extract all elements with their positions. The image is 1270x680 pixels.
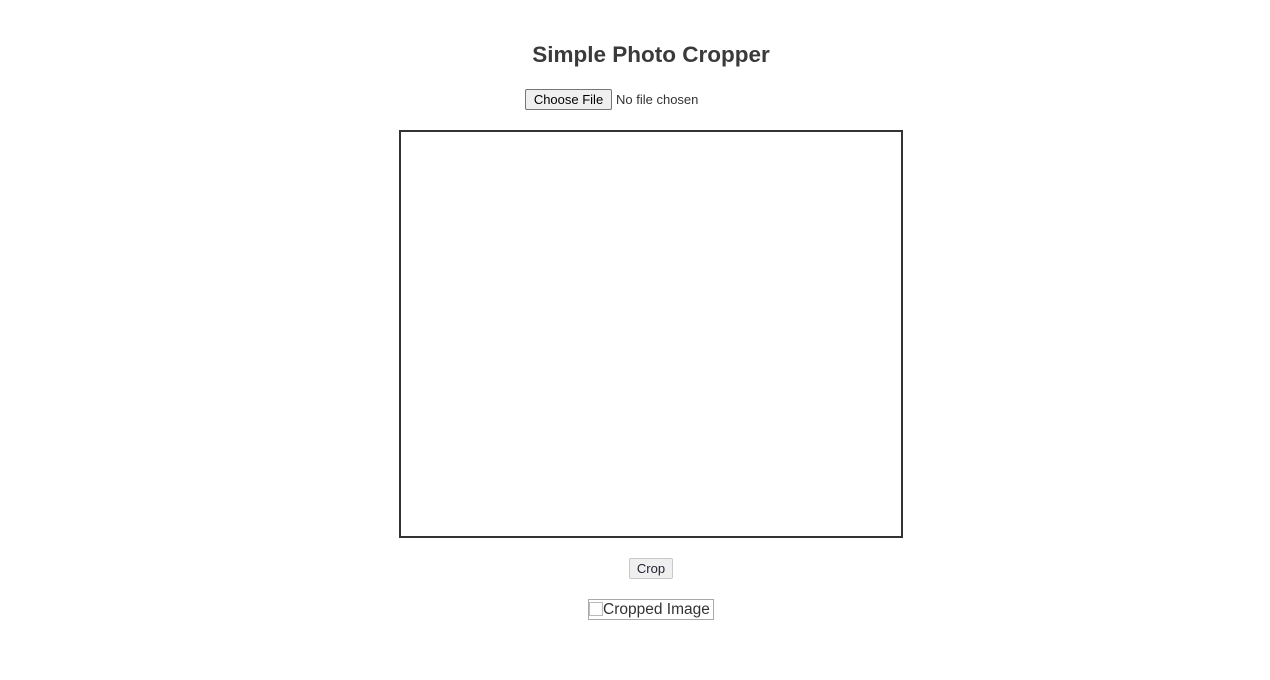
title: Simple Photo Cropper (532, 42, 770, 67)
image crop area (399, 130, 903, 538)
file input (525, 89, 698, 110)
choose file button (525, 89, 612, 110)
file status text: No file chosen (616, 92, 698, 107)
crop button (629, 558, 673, 579)
cropped image placeholder (588, 599, 714, 620)
choose file button: Choose File (534, 92, 603, 107)
cropped image placeholder: Cropped Image (603, 601, 710, 618)
crop button: Crop (637, 561, 665, 576)
